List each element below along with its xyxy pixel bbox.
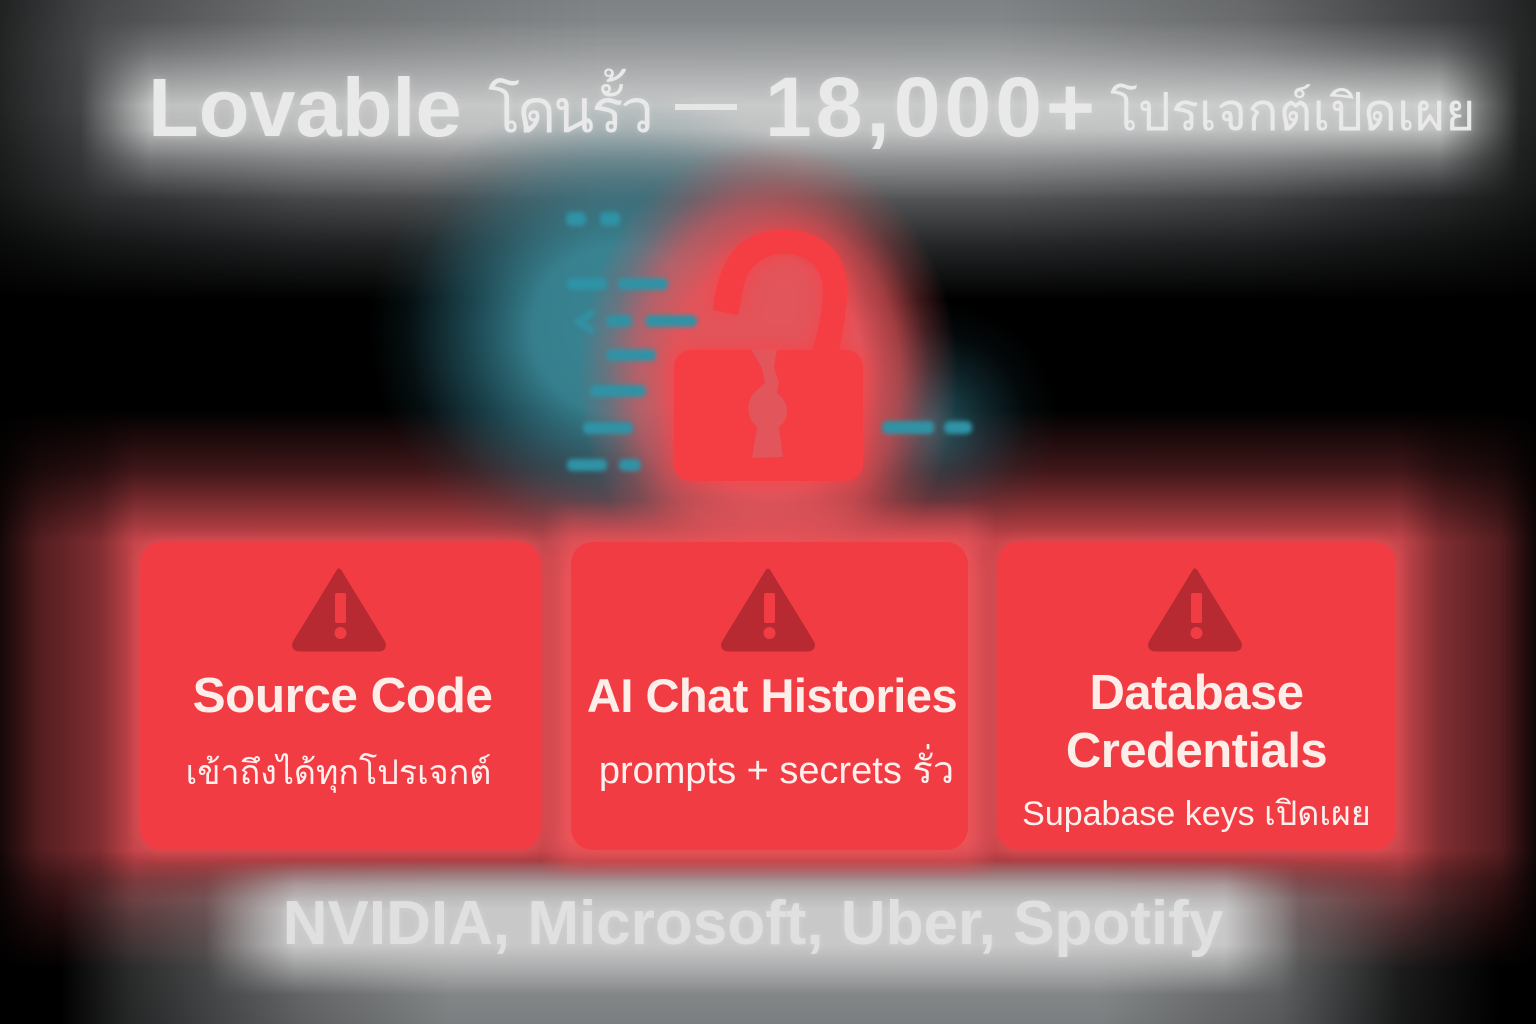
text: เข้าถึงได้ทุกโปรเจกต์ [186, 754, 491, 792]
icon: code lines left [564, 210, 700, 474]
footer: affected companies: NVIDIA, Microsoft, Uber, Spotify [283, 889, 1223, 958]
title: dash [675, 104, 737, 110]
icon: warning triangle [1148, 568, 1242, 652]
keyhole and crack [748, 349, 787, 458]
panel: source code [140, 542, 541, 850]
heading: Credentials [1066, 724, 1327, 778]
heading: AI Chat Histories [587, 669, 957, 722]
padlock body [674, 350, 863, 481]
panel: AI chat histories [571, 542, 968, 850]
panel: database credentials [997, 542, 1396, 850]
title: Lovable: Lovable [148, 61, 462, 154]
title: Thai tail: โปรเจกต์เปิดเผย [1110, 84, 1476, 142]
heading: Database [1090, 666, 1303, 720]
icon: broken open padlock [666, 221, 872, 488]
icon: warning triangle [292, 568, 386, 652]
text: prompts + secrets รั่ว [599, 750, 954, 792]
heading: Source Code [193, 668, 492, 723]
title: Thai word: โดนรั้ว [488, 78, 651, 145]
padlock shackle [713, 230, 847, 352]
icon: warning triangle [721, 568, 815, 652]
text: Supabase keys เปิดเผย [1022, 795, 1371, 833]
title [148, 60, 1476, 154]
heading [1066, 666, 1327, 778]
icon: code lines right [878, 418, 975, 438]
title: count: 18,000+ [765, 60, 1099, 154]
